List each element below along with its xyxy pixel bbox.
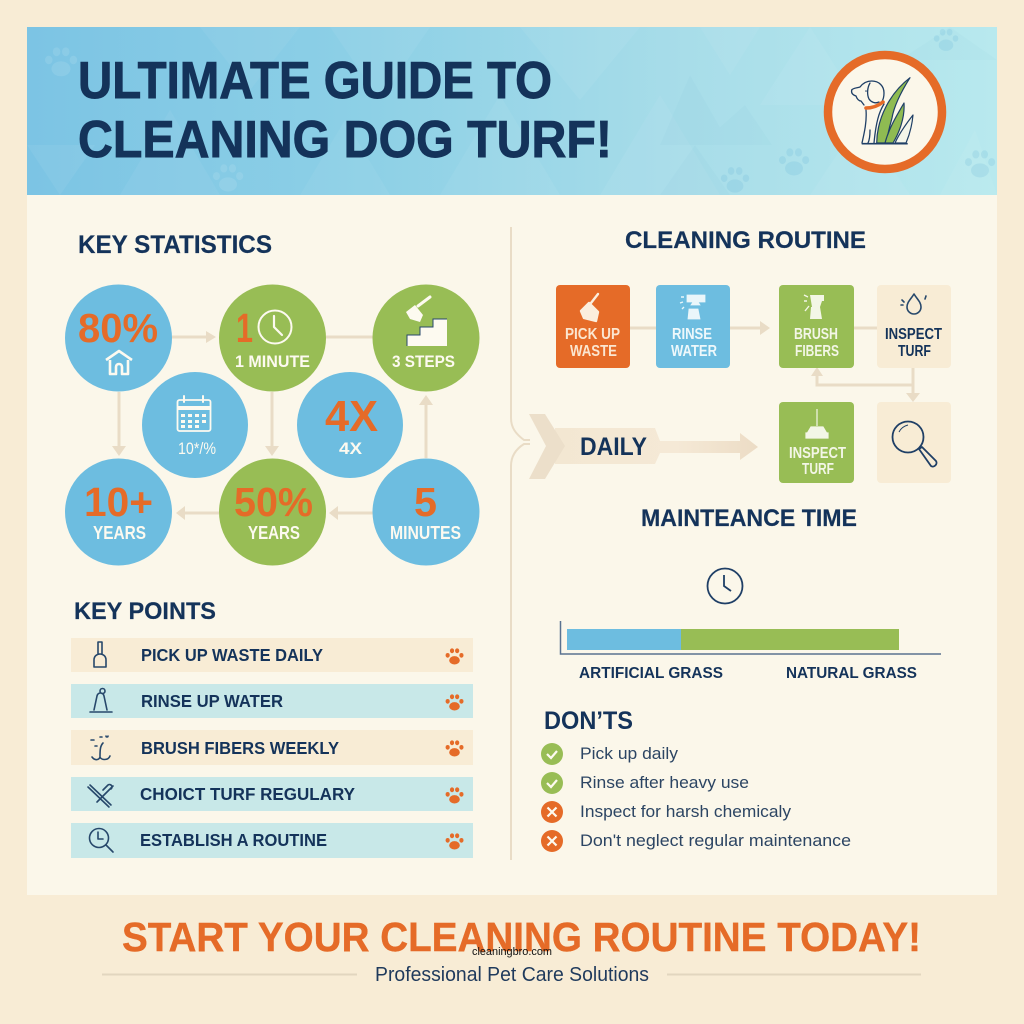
footer call to action: START YOUR CLEANING ROUTINE TODAY! (122, 914, 921, 960)
step: rinse water: WATER (671, 343, 717, 360)
arrows between circles (112, 331, 433, 520)
item: pick up daily: Pick up daily (580, 744, 679, 763)
row: rinse up water: RINSE UP WATER (141, 691, 283, 711)
stat: 5 minutes: MINUTES (390, 523, 461, 543)
daily arrow (529, 414, 758, 479)
stat: 5 minutes: 5 (414, 479, 437, 525)
title (78, 52, 612, 169)
stat: 50% years: 50% (234, 479, 313, 525)
row: brush fibers weekly (71, 730, 473, 765)
stat: 1 minute (219, 284, 326, 392)
panel: key points list (71, 638, 473, 858)
heading: key points: KEY POINTS (74, 598, 216, 625)
stat: 4X: 4X (325, 392, 378, 441)
connectors (630, 321, 920, 402)
step: inspect turf with broom: TURF (802, 461, 834, 478)
row: establish a routine (71, 823, 473, 858)
heading: key statistics: KEY STATISTICS (78, 231, 272, 259)
step: rinse water (656, 285, 730, 368)
stat: 1 minute: 1 (236, 305, 253, 351)
chart: statistics circle network (65, 284, 480, 566)
step: inspect turf: INSPECT (885, 326, 942, 343)
flowchart: cleaning routine (529, 285, 951, 483)
item: rinse after heavy use (541, 772, 749, 794)
panel: do and don't list (541, 743, 851, 852)
row: pick up waste daily (71, 638, 473, 672)
step: brush fibers: BRUSH (794, 326, 838, 343)
step: pick up waste: PICK UP (565, 326, 620, 343)
stat: 50% years (219, 458, 326, 566)
grass blades (895, 115, 913, 143)
icon: magnifying glass (877, 402, 951, 483)
stat: 10+ years (65, 458, 172, 566)
row: choict turf regulary (71, 777, 473, 811)
stat: 50% years: YEARS (248, 523, 300, 543)
step: rinse water: RINSE (672, 326, 712, 343)
stat: 4X: 4X (339, 439, 363, 458)
row: establish a routine: ESTABLISH A ROUTINE (140, 830, 327, 850)
icon: clock (708, 568, 742, 604)
stat: 10+ years: YEARS (93, 523, 146, 543)
watermark url: cleaningbro.com (472, 946, 552, 958)
stat: 1 minute: 1 MINUTE (235, 352, 310, 371)
header banner (27, 27, 997, 195)
stat: calendar 10% (142, 372, 248, 478)
chart: maintenance time bars: ARTIFICIAL GRASS (579, 665, 723, 682)
dog outline (852, 81, 884, 143)
step: brush fibers: FIBERS (795, 343, 839, 360)
item: rinse after heavy use: Rinse after heavy use (580, 773, 749, 792)
row: choict turf regulary: CHOICT TURF REGULARY (140, 784, 355, 804)
title: ULTIMATE GUIDE TO (78, 52, 552, 110)
column divider (511, 227, 530, 860)
item: inspect for harsh chemicaly: Inspect for harsh chemicaly (580, 802, 792, 821)
icon: dog and grass badge (828, 55, 942, 169)
stat: 5 minutes (372, 458, 480, 566)
stat: 3 steps (372, 284, 480, 392)
heading: don'ts: DON’TS (544, 707, 633, 735)
chart: maintenance time bars: NATURAL GRASS (786, 665, 917, 682)
step: pick up waste (556, 285, 630, 368)
step: pick up waste: WASTE (570, 343, 617, 360)
step: inspect turf with broom: INSPECT (789, 445, 846, 462)
footer tagline: Professional Pet Care Solutions (375, 964, 649, 986)
item: pick up daily (541, 743, 679, 765)
stat: 3 steps: 3 STEPS (392, 352, 455, 371)
step: inspect turf with broom (779, 402, 854, 483)
title: CLEANING DOG TURF! (78, 111, 612, 169)
row: pick up waste daily: PICK UP WASTE DAILY (141, 645, 323, 665)
stat: calendar 10%: 10*/% (178, 439, 216, 458)
stat: 80% (65, 284, 172, 392)
step: brush fibers (779, 285, 854, 368)
daily arrow: DAILY (580, 433, 647, 461)
stat: 80%: 80% (78, 305, 158, 351)
stat: 4X (297, 372, 403, 478)
heading: maintenance time: MAINTEANCE TIME (641, 505, 857, 532)
item: don't neglect regular maintenance: Don't neglect regular maintenance (580, 831, 851, 850)
chart: maintenance time bars (560, 621, 941, 682)
stat: 10+ years: 10+ (84, 479, 153, 525)
row: brush fibers weekly: BRUSH FIBERS WEEKLY (141, 738, 339, 758)
step: inspect turf (877, 285, 951, 368)
row: rinse up water (71, 684, 473, 718)
heading: cleaning routine: CLEANING ROUTINE (625, 227, 866, 254)
step: inspect turf: TURF (898, 343, 931, 360)
